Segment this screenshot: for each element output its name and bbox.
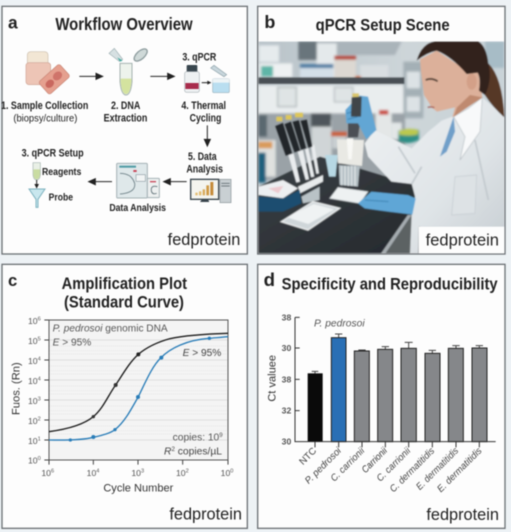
label: thermal cycling: Cycling (190, 113, 221, 125)
watermark box: fedprotein: fedprotein (426, 230, 499, 249)
blue curve (49, 337, 228, 440)
y axis tick labels: 6 (38, 317, 41, 323)
panel a: workflow overview (1, 6, 247, 254)
heading: amplification plot (62, 274, 187, 311)
y axis tick labels: 10 (28, 316, 38, 326)
panel c: amplification plot (2, 264, 247, 528)
y axis tick labels (28, 316, 41, 465)
y axis tick labels: 10 (28, 376, 38, 386)
plot annotations: E > 95% (183, 348, 221, 359)
panel d: specificity and reproducibility (258, 264, 505, 528)
bar: NTC (308, 373, 323, 442)
microplate under pipette (330, 187, 368, 203)
x axis labels: C. carrionii (329, 445, 368, 484)
rack with pipettes (275, 113, 323, 203)
y axis tick labels: 10 (28, 455, 38, 465)
lab coat (365, 97, 504, 253)
y axis tick labels: 0 (38, 456, 41, 462)
y axis tick labels: 32 (282, 406, 291, 416)
arrow: sample to extraction (79, 73, 103, 79)
x axis tick labels: 2 (186, 469, 189, 475)
plot annotations (53, 324, 223, 457)
x axis tick labels: 10 (41, 468, 51, 478)
watermark: fedprotein: fedprotein (169, 504, 242, 523)
photo: scientist pipetting in lab (258, 41, 504, 253)
x axis labels: E. dermatitidis (414, 446, 461, 493)
small blue beaker (325, 155, 338, 177)
label: probe: Probe (49, 193, 73, 204)
icon: extraction tube and pipette (109, 47, 149, 95)
label: 3. qPCR: 3. qPCR (182, 51, 217, 63)
plot annotations: copies: 10 (173, 432, 218, 443)
grey comparison bars (354, 348, 487, 442)
y axis tick labels: 38 (282, 312, 291, 322)
shelf edge (258, 77, 404, 84)
plot annotations: 2 (171, 447, 176, 453)
label: 5. data analysis: 5. Data (188, 151, 217, 163)
plot annotations: 9 (219, 433, 223, 439)
label: thermal cycling: 4. Thermal (181, 100, 226, 112)
y axis tick labels: 10 (28, 436, 38, 446)
y axis tick labels: 1 (38, 437, 41, 443)
watermark: fedprotein: fedprotein (426, 505, 499, 524)
y axis tick labels: 38 (282, 374, 291, 384)
y axis tick labels: 2 (38, 417, 41, 423)
label: sample collection: 1. Sample Collection (1, 100, 88, 112)
label: sample collection (1, 100, 88, 125)
tip box (258, 180, 298, 198)
arrow: extraction to qPCR (150, 73, 174, 79)
y axis tick labels: 30 (282, 343, 291, 353)
y axis tick labels: 10 (28, 416, 38, 426)
plot annotations: P. pedrosoi genomic DNA (53, 324, 168, 335)
panel letter c: c (8, 271, 17, 290)
arrow: dashboard to setup (89, 179, 112, 185)
upper blue glove (345, 95, 376, 139)
y axis tick labels: 5 (38, 337, 41, 343)
y axis tick labels: 30 (282, 437, 291, 447)
watermark box: fedprotein (419, 227, 504, 253)
y axis tick labels: 4 (38, 357, 41, 363)
label: thermal cycling (181, 100, 226, 125)
plot annotations: R (164, 446, 171, 457)
lower blue glove (358, 192, 416, 215)
label: data analysis: Data Analysis (109, 203, 166, 214)
microplate front (281, 202, 340, 230)
label: sample collection: (biopsy/culture) (13, 114, 77, 125)
icon: computer with bar chart (191, 179, 231, 203)
y axis tick labels: 4 (38, 377, 41, 383)
annotation: P. pedrosoi: P. pedrosoi (314, 319, 365, 330)
x axis tick labels: 10 (221, 468, 230, 478)
panel letter d: d (264, 269, 275, 290)
bar chart: Ct values (267, 312, 496, 495)
face and neck (420, 51, 482, 117)
label: DNA extraction: Extraction (104, 113, 147, 125)
heading: workflow overview: Workflow Overview (55, 14, 193, 34)
x axis tick labels: 10 (131, 468, 141, 478)
label: DNA extraction: 2. DNA (111, 100, 141, 112)
label: qPCR setup: 3. qPCR Setup (22, 148, 84, 160)
x axis tick labels: 3 (141, 469, 144, 475)
x axis labels: P. pedrosoi (303, 445, 344, 486)
x axis labels: E. dermatitidis (435, 446, 485, 495)
icon: reagents tube and probe funnel (29, 163, 45, 207)
heading: qPCR setup scene: qPCR Setup Scene (316, 15, 450, 34)
x axis tick labels (41, 468, 233, 478)
y axis tick labels: 10 (28, 396, 38, 406)
error bars (312, 334, 483, 373)
x axis tick labels: 0 (230, 469, 233, 475)
hair (417, 41, 504, 117)
x axis labels: C. dermatitidis (388, 446, 437, 495)
arrow: computer to dashboard (164, 179, 187, 185)
panel letter b: b (264, 12, 275, 32)
y axis title: Ct valuee (267, 355, 279, 402)
watermark: fedprotein: fedprotein (168, 230, 240, 249)
icon: sample jar and tissue (26, 52, 70, 95)
y axis title: Fuos. (Rn) (10, 362, 22, 415)
x axis tick labels: 10 (87, 468, 96, 478)
panel letter a: a (8, 13, 18, 33)
y axis tick labels: 10 (28, 336, 38, 346)
label: 5. data analysis (186, 151, 223, 176)
y axis tick labels (282, 312, 291, 447)
icon: qPCR vial and reservoir (185, 65, 229, 93)
bar: P. pedrosoi (331, 338, 346, 442)
label: reagents: Reagents (42, 167, 82, 178)
data points (69, 337, 211, 442)
label: DNA extraction (104, 100, 147, 125)
x axis labels: C. carrionii (375, 445, 414, 484)
heading: amplification plot: (Standard Curve) (64, 292, 184, 311)
x axis tick labels: 6 (51, 469, 54, 475)
x axis labels: NTC (297, 446, 319, 467)
x axis title: Cycle Number (103, 482, 174, 494)
icon: data analysis dashboard (117, 163, 159, 198)
y axis tick labels: 3 (38, 397, 41, 403)
y axis tick labels: 10 (28, 356, 38, 366)
bench (258, 157, 420, 253)
plot annotations: E > 95% (53, 338, 91, 349)
arrow: cycling to data analysis (204, 125, 210, 146)
plot annotations: copies/µL (175, 446, 222, 457)
lab shelves and bottles (258, 41, 504, 183)
line chart: amplification curves (10, 316, 233, 494)
label: 5. data analysis: Analysis (186, 164, 223, 176)
black curve (49, 333, 228, 432)
x axis labels (297, 445, 485, 495)
axes (295, 317, 496, 447)
multichannel pipette (337, 113, 364, 187)
heading: amplification plot: Amplification Plot (62, 274, 187, 293)
x axis labels: Carrionii (360, 445, 390, 476)
x axis tick labels: 4 (96, 469, 99, 475)
panel b: qPCR setup scene (258, 6, 505, 254)
x axis tick labels: 10 (176, 468, 186, 478)
